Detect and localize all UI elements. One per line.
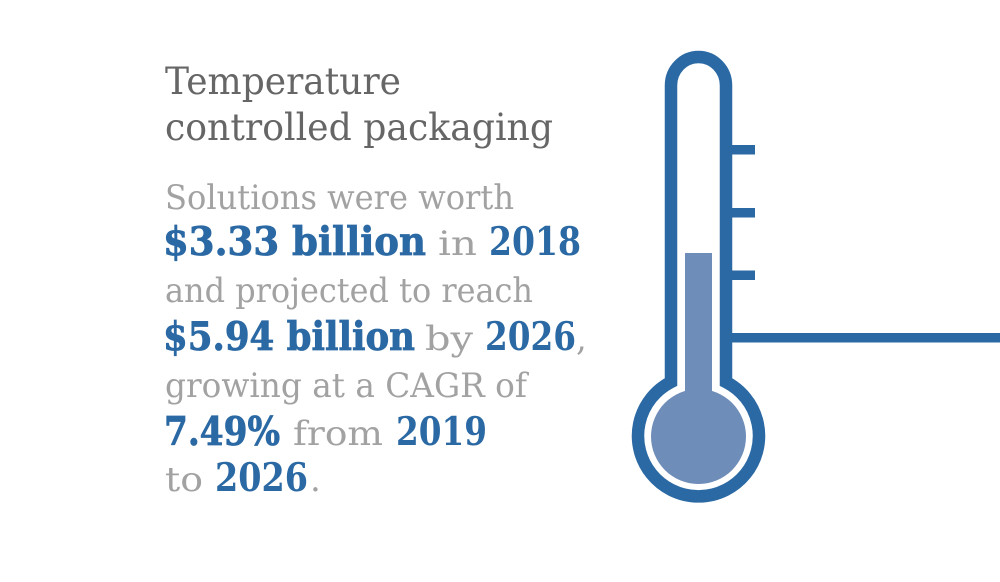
text block: market statistics: 7.49% [164, 409, 280, 455]
title: controlled packaging [165, 106, 553, 149]
title [165, 60, 553, 149]
leader line [730, 333, 1000, 342]
text block: market statistics: and projected to reach [165, 271, 533, 311]
text block: market statistics: by [425, 319, 474, 359]
text block: market statistics: , [576, 319, 587, 359]
text block: market statistics: 2018 [489, 219, 581, 265]
title: Temperature [165, 60, 401, 103]
thermometer tick marks [730, 145, 755, 280]
thermometer fill level [651, 253, 746, 484]
text block: market statistics: Solutions were worth [165, 178, 514, 218]
icon: thermometer [638, 57, 1000, 496]
text block: market statistics: from [293, 414, 383, 454]
text block: market statistics: 2026 [485, 314, 576, 360]
text block: market statistics: $3.33 billion [163, 219, 426, 265]
text block: market statistics: in [438, 224, 477, 264]
text block: market statistics: . [310, 460, 321, 500]
text block: market statistics: 2019 [396, 409, 487, 455]
text block: market statistics: 2026 [215, 455, 308, 501]
text block: market statistics: to [165, 460, 203, 500]
text block: market statistics: $5.94 billion [163, 314, 415, 360]
text block: market statistics: growing at a CAGR of [165, 366, 529, 406]
text block: market statistics [163, 178, 587, 501]
thermometer outline [638, 57, 759, 496]
